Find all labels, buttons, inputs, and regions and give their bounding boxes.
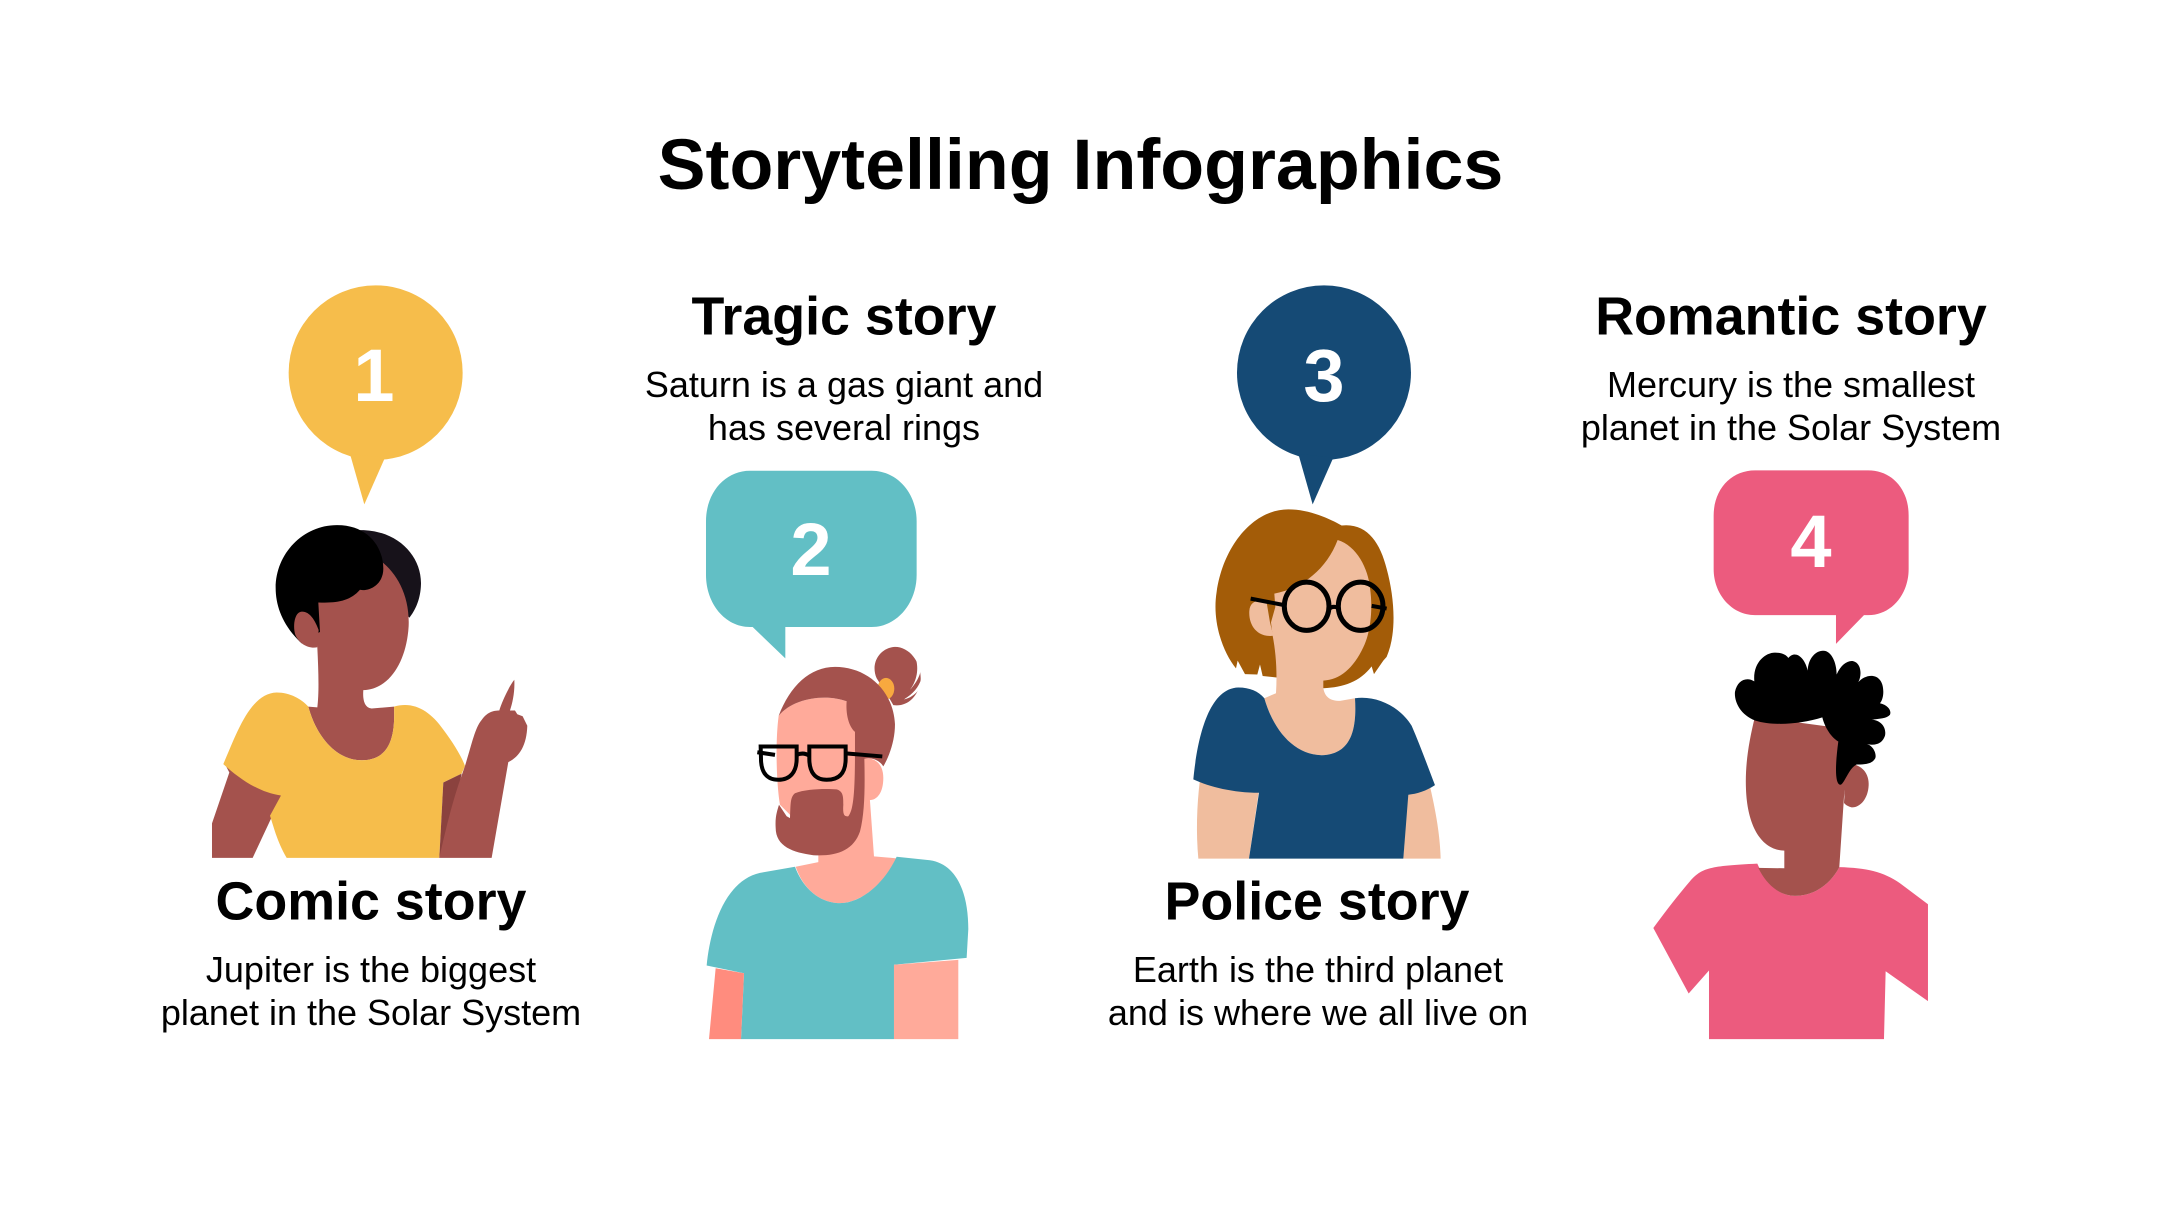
- description: comic story: planet in the Solar System: [161, 992, 581, 1033]
- number 2: 2: [790, 508, 832, 591]
- character: bearded man with bun: [707, 647, 968, 1039]
- heading: police story: Police story: [1165, 872, 1470, 932]
- speech bubble 4: [1714, 470, 1909, 644]
- speech bubble 2: [706, 471, 917, 658]
- description: comic story: Jupiter is the biggest: [206, 949, 536, 990]
- speech bubble 3: [1237, 285, 1411, 504]
- number 1: 1: [353, 334, 395, 417]
- panel: romantic story: [1581, 286, 2001, 1039]
- description: police story: Earth is the third planet: [1133, 949, 1503, 990]
- panel: police story: [1108, 285, 1528, 1033]
- number 3: 3: [1303, 334, 1345, 417]
- character: woman with glasses: [1193, 509, 1441, 859]
- character: man with curly hair: [1653, 651, 1928, 1039]
- description: tragic story: has several rings: [708, 407, 980, 448]
- title: Storytelling Infographics: [658, 125, 1503, 205]
- heading: romantic story: Romantic story: [1595, 286, 1987, 346]
- description: romantic story: planet in the Solar System: [1581, 407, 2001, 448]
- panel: tragic story: [645, 286, 1043, 1039]
- description: police story: and is where we all live on: [1108, 992, 1528, 1033]
- character: woman pointing: [212, 525, 527, 858]
- speech bubble 1: [289, 285, 463, 504]
- heading: tragic story: Tragic story: [692, 286, 997, 346]
- description: tragic story: Saturn is a gas giant and: [645, 364, 1043, 405]
- heading: comic story: Comic story: [216, 872, 527, 932]
- panel: comic story: [161, 285, 581, 1033]
- description: romantic story: Mercury is the smallest: [1607, 364, 1975, 405]
- number 4: 4: [1790, 500, 1832, 583]
